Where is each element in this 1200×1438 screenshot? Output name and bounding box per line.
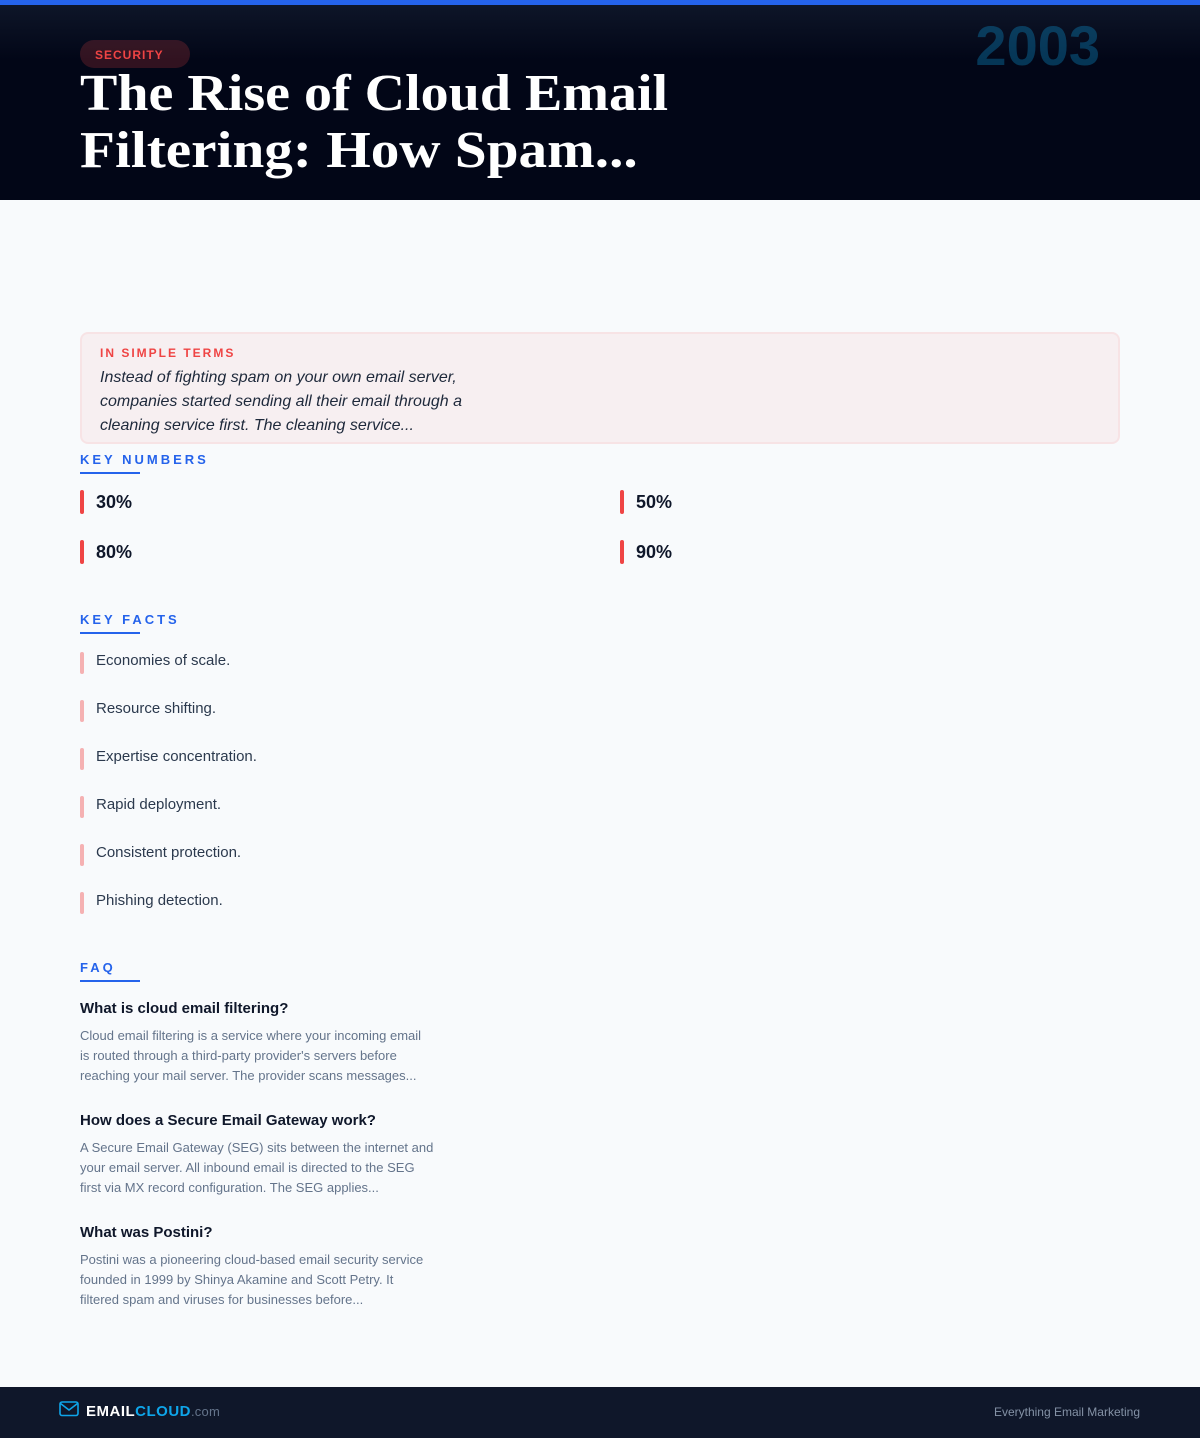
stat: 90%: 90% <box>636 542 672 562</box>
faq item: secure email gateway: A Secure Email Gateway (SEG) sits between the internet and <box>80 1140 433 1155</box>
fact: economies of scale: Economies of scale. <box>96 652 230 669</box>
heading: key facts: KEY FACTS <box>80 612 180 627</box>
faq item: postini: founded in 1999 by Shinya Akamine and Scott Petry. It <box>80 1272 393 1287</box>
footer <box>0 1387 1200 1438</box>
callout text <box>100 369 462 434</box>
heading: key numbers: KEY NUMBERS <box>80 452 209 467</box>
faq item: secure email gateway <box>80 1112 433 1195</box>
faq item: postini <box>80 1224 423 1307</box>
faq item: postini: filtered spam and viruses for businesses before... <box>80 1292 363 1307</box>
year watermark: 2003 <box>975 14 1100 77</box>
faq item: secure email gateway: your email server. All inbound email is directed to the SEG <box>80 1160 415 1175</box>
tagline: Everything Email Marketing <box>994 1405 1140 1419</box>
fact: resource shifting: Resource shifting. <box>96 700 216 717</box>
callout: in simple terms <box>80 332 1120 444</box>
header banner <box>0 0 1200 200</box>
category badge: SECURITY <box>95 48 164 62</box>
top accent bar <box>0 0 1200 5</box>
faq item: secure email gateway: How does a Secure Email Gateway work? <box>80 1112 376 1129</box>
stat: 30% <box>80 490 132 514</box>
faq item: postini: Postini was a pioneering cloud-based email security service <box>80 1252 423 1267</box>
fact: rapid deployment: Rapid deployment. <box>96 796 221 813</box>
fact: consistent protection <box>80 844 241 866</box>
title: Filtering: How Spam... <box>80 122 638 179</box>
fact: resource shifting <box>80 700 216 722</box>
category badge <box>80 40 190 68</box>
stat: 50% <box>620 490 672 514</box>
callout text: companies started sending all their email through a <box>100 393 462 410</box>
faq item: postini: What was Postini? <box>80 1224 213 1241</box>
fact: phishing detection <box>80 892 223 914</box>
faq item: cloud email filtering: Cloud email filtering is a service where your incoming email <box>80 1028 421 1043</box>
stat: 80% <box>80 540 132 564</box>
title <box>80 65 668 179</box>
fact: rapid deployment <box>80 796 221 818</box>
icon: envelope <box>59 1401 79 1416</box>
fact: consistent protection: Consistent protection. <box>96 844 241 861</box>
faq item: cloud email filtering: What is cloud email filtering? <box>80 1000 288 1017</box>
faq item: cloud email filtering <box>80 1000 421 1083</box>
stat: 50%: 50% <box>636 492 672 512</box>
logo wordmark: EMAILCLOUD.com <box>86 1403 220 1420</box>
faq item: cloud email filtering: is routed through a third-party provider's servers before <box>80 1048 397 1063</box>
stat: 80%: 80% <box>96 542 132 562</box>
callout label: IN SIMPLE TERMS <box>100 346 235 360</box>
faq item: cloud email filtering: reaching your mail server. The provider scans messages... <box>80 1068 416 1083</box>
stat: 90% <box>620 540 672 564</box>
stat: 30%: 30% <box>96 492 132 512</box>
title: The Rise of Cloud Email <box>80 65 668 122</box>
fact: economies of scale <box>80 652 230 674</box>
fact: phishing detection: Phishing detection. <box>96 892 223 909</box>
faq item: secure email gateway: first via MX record configuration. The SEG applies... <box>80 1180 379 1195</box>
callout text: cleaning service first. The cleaning service... <box>100 417 414 434</box>
fact: expertise concentration: Expertise concentration. <box>96 748 257 765</box>
heading: faq: FAQ <box>80 960 116 975</box>
callout text: Instead of fighting spam on your own email server, <box>100 369 457 386</box>
